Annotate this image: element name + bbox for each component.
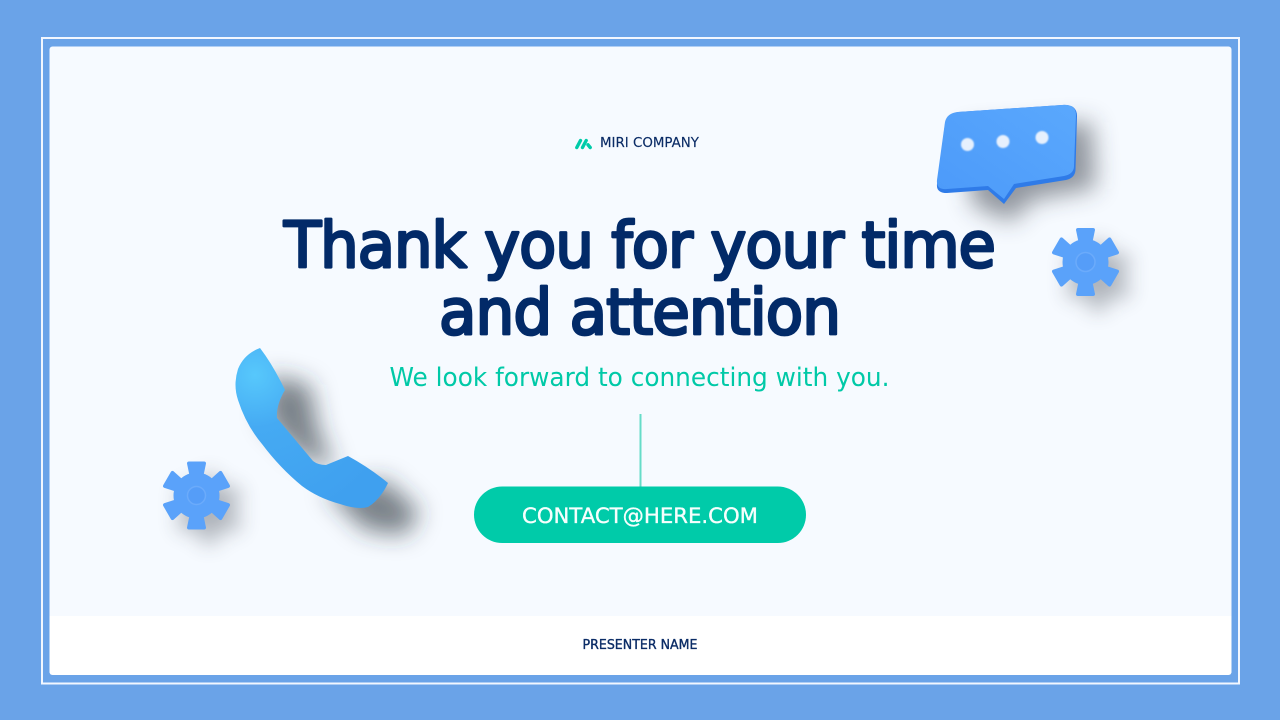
- footer bar: [50, 616, 1232, 675]
- presenter name: PRESENTER NAME: [582, 638, 698, 653]
- title: and attention: [439, 275, 840, 349]
- bubble dots: [961, 131, 1048, 151]
- subtitle: We look forward to connecting with you.: [390, 363, 890, 393]
- company name: MIRI COMPANY: [600, 136, 699, 151]
- contact button: [474, 486, 806, 543]
- title: Thank you for your time: [283, 208, 995, 282]
- phone shadow: [265, 375, 420, 535]
- icon: phone handset: [236, 348, 420, 535]
- icon: gear right: [1051, 228, 1132, 310]
- icon: speech bubble: [937, 105, 1096, 222]
- icon: company logo: [577, 140, 590, 148]
- contact button: CONTACT@HERE.COM: [522, 504, 758, 529]
- title: [283, 208, 995, 349]
- icon: gear left: [162, 462, 243, 543]
- company logo and name: [577, 136, 699, 151]
- connector line: [640, 414, 642, 487]
